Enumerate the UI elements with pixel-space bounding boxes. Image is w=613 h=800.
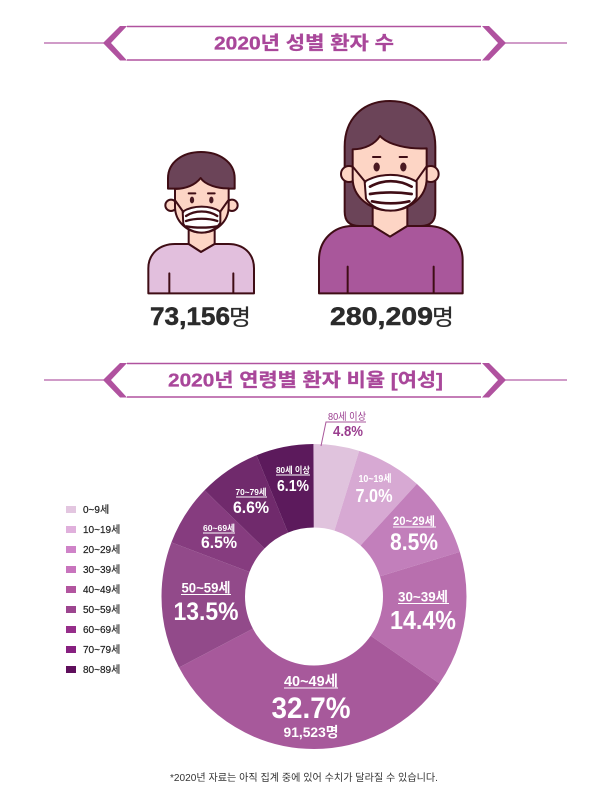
legend: 50~59세 bbox=[83, 604, 120, 616]
callout: 80+ outside label: 4.8% bbox=[333, 424, 363, 440]
donut chart: age distribution bbox=[203, 486, 425, 707]
label: 50-59 bbox=[174, 580, 238, 626]
footnote: *2020년 자료는 아직 집계 중에 있어 수치가 달라질 수 있습니다. bbox=[170, 772, 438, 784]
legend: 0~9세 bbox=[83, 504, 109, 516]
heading: age section banner bbox=[44, 363, 567, 398]
callout: 80+ outside label bbox=[321, 411, 366, 446]
label: 80+ inside: 80세 이상 bbox=[276, 465, 310, 475]
label: 50-59: 50~59세 bbox=[182, 580, 230, 596]
callout: 80+ outside label: 80세 이상 bbox=[328, 411, 366, 423]
label: 10-19 bbox=[356, 472, 392, 506]
heading: gender section banner: 2020년 성별 환자 수 bbox=[214, 32, 394, 54]
legend: 70~79세 bbox=[83, 644, 120, 656]
legend: 10~19세 bbox=[83, 524, 120, 536]
label: 30-39 bbox=[390, 590, 456, 635]
label: 80+ inside bbox=[276, 465, 310, 495]
legend: 20~29세 bbox=[83, 544, 120, 556]
legend: 60~69세 bbox=[83, 624, 120, 636]
text: female patient count: 명 bbox=[432, 305, 454, 330]
label: 20-29: 8.5% bbox=[390, 529, 438, 556]
heading: gender section banner bbox=[44, 26, 567, 60]
icon: man with mask bbox=[148, 152, 254, 293]
label: 30-39: 30~39세 bbox=[398, 590, 448, 604]
label: 40-49: 40~49세 bbox=[284, 673, 338, 690]
icon: woman with mask bbox=[319, 101, 463, 293]
heading: age section banner: 2020년 연령별 환자 비율 [여성] bbox=[168, 370, 443, 390]
label: 70-79 bbox=[233, 487, 269, 517]
label: 50-59: 13.5% bbox=[174, 598, 238, 626]
label: 20-29 bbox=[390, 515, 438, 556]
label: 40-49 bbox=[272, 673, 350, 740]
label: 60-69 bbox=[201, 523, 237, 552]
label: 60-69: 60~69세 bbox=[203, 523, 235, 533]
legend: 40~49세 bbox=[83, 584, 120, 596]
legend: 30~39세 bbox=[83, 564, 120, 576]
label: 20-29: 20~29세 bbox=[393, 515, 435, 528]
text: male patient count: 명 bbox=[229, 305, 251, 330]
legend: 80~89세 bbox=[83, 664, 120, 676]
label: 10-19: 10~19세 bbox=[358, 472, 392, 485]
label: 70-79: 6.6% bbox=[233, 499, 269, 517]
label: 70-79: 70~79세 bbox=[236, 487, 267, 497]
text: female patient count: 280,209 bbox=[330, 303, 433, 331]
text: male patient count: 73,156 bbox=[150, 303, 230, 331]
label: 40-49: 32.7% bbox=[272, 692, 350, 725]
label: 60-69: 6.5% bbox=[201, 534, 237, 552]
label: 30-39: 14.4% bbox=[390, 607, 456, 635]
label: 80+ inside: 6.1% bbox=[277, 478, 309, 495]
label: 40-49: 91,523명 bbox=[284, 724, 338, 740]
legend bbox=[66, 504, 120, 676]
label: 10-19: 7.0% bbox=[356, 485, 392, 506]
